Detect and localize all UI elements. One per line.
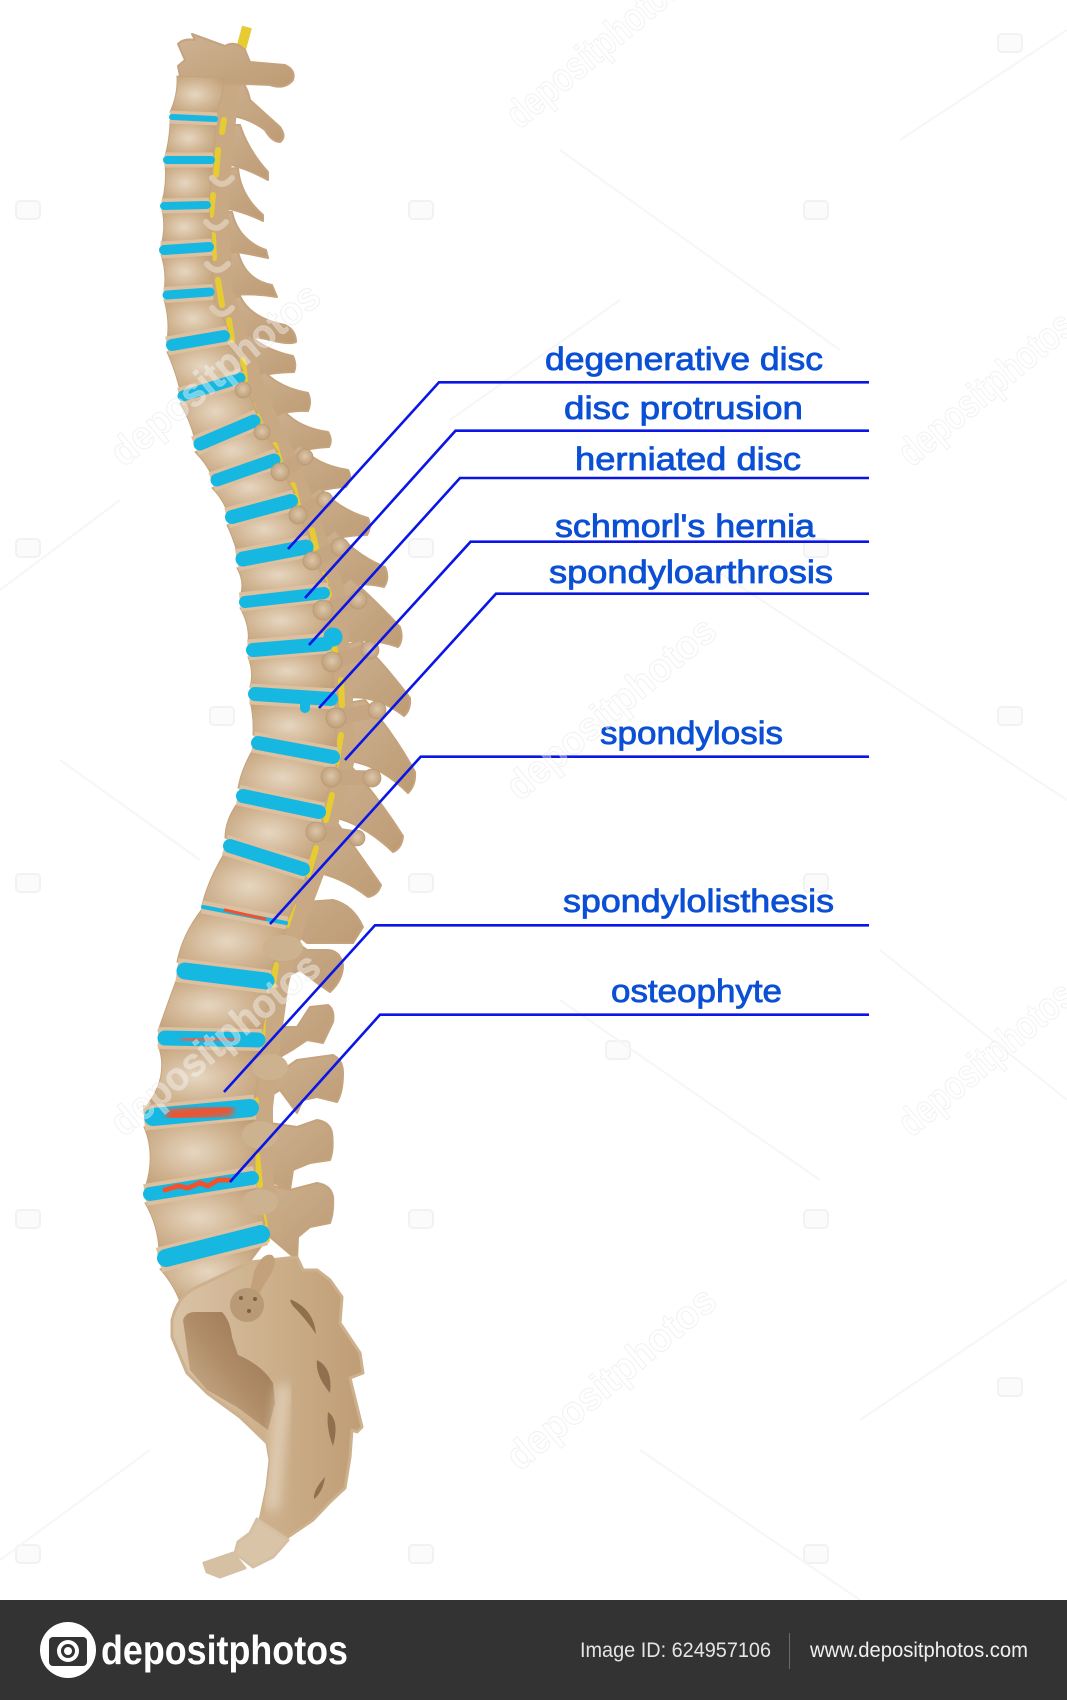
condition labels [545,341,834,1009]
spinous and transverse processes [210,75,415,1260]
condition labels: spondylolisthesis [563,883,834,919]
bone backing behind the body column [218,84,344,1233]
lumbar articular facets [242,935,303,1215]
diagonal depositphotos watermarks: depositphotos [498,608,725,809]
atlas top vertebra [178,34,294,87]
articular knobs [235,382,386,846]
herniated disc blob [324,628,342,646]
damaged disc red areas [165,910,265,1190]
condition labels: spondylosis [600,715,783,751]
leader lines [224,382,869,1182]
logo wordmark: depositphotos [101,1627,348,1673]
upper thoracic curved facets [206,178,232,314]
articular process bars [280,457,377,838]
icon: camera logo [40,1622,96,1678]
coccyx [204,1519,288,1577]
footer bar [0,1600,1067,1700]
intervertebral discs [150,117,333,1258]
website: www.depositphotos.com [809,1639,1028,1662]
condition labels: spondyloarthrosis [549,554,833,590]
condition labels: disc protrusion [564,390,803,426]
condition labels: degenerative disc [545,341,823,377]
spine illustration [144,27,415,1577]
image id: Image ID: 624957106 [580,1639,771,1662]
separator [789,1633,790,1669]
disc rims [144,117,337,1260]
condition labels: schmorl's hernia [555,508,815,544]
diagonal depositphotos watermarks: depositphotos [498,1278,725,1479]
diagonal depositphotos watermarks [102,0,1067,1479]
diagonal depositphotos watermarks: depositphotos [102,944,329,1145]
condition labels: herniated disc [575,441,801,477]
condition labels: osteophyte [611,973,782,1009]
vertebral bodies [144,76,337,1302]
diagonal depositphotos watermarks: depositphotos [102,274,329,475]
sacrum [172,1255,363,1537]
spinal cord [211,27,342,1240]
